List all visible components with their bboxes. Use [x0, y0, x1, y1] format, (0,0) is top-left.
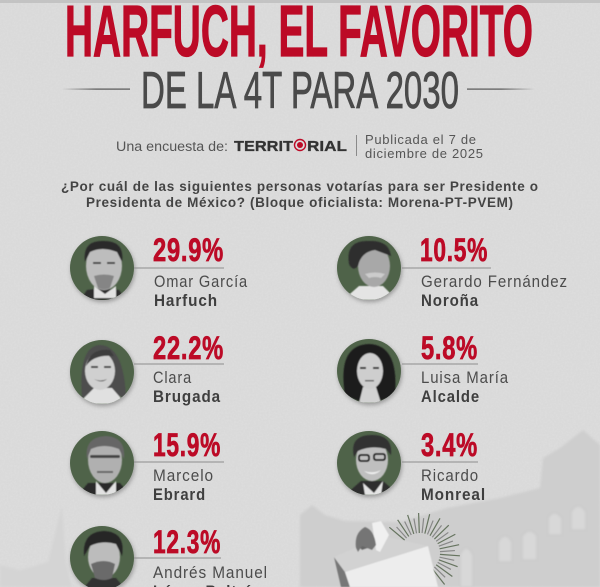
portrait: López Beltrán: [70, 526, 134, 587]
candidate: Andrés Manuel López Beltrán: [70, 524, 268, 587]
candidate: Clara Brugada: [70, 330, 224, 406]
value 12.3%: 12.3%: [153, 524, 221, 560]
value 3.4%: 3.4%: [421, 427, 478, 463]
candidate: Ricardo Monreal: Ricardo: [421, 466, 479, 485]
candidate: Luisa María Alcalde: Luisa María: [421, 368, 509, 387]
icon: ballot box with hand: [334, 521, 438, 587]
Territorial logo: TERRIT: [234, 139, 293, 155]
portrait: Brugada: [70, 340, 134, 404]
portrait: Monreal: [337, 431, 401, 495]
candidate: Andrés Manuel López Beltrán: Andrés Manuel: [153, 563, 268, 582]
portrait: Harfuch: [70, 236, 134, 300]
portrait: Alcalde: [337, 339, 401, 403]
candidate: Clara Brugada: Brugada: [153, 387, 221, 406]
candidate: Marcelo Ebrard: [70, 427, 224, 504]
survey question: [61, 179, 538, 210]
candidate: Luisa María Alcalde: Alcalde: [421, 387, 480, 406]
survey question: ¿Por cuál de las siguientes personas votarías para ser Presidente o: [61, 179, 538, 194]
candidate: Omar García Harfuch: Harfuch: [154, 291, 218, 310]
value 22.2%: 22.2%: [153, 330, 224, 366]
candidate: Gerardo Fernández Noroña: Noroña: [421, 291, 479, 310]
building silhouette background: [0, 430, 600, 587]
Territorial logo: RIAL: [307, 139, 347, 155]
candidate: Ricardo Monreal: Monreal: [421, 485, 486, 504]
survey credit line: diciembre de 2025: [365, 146, 483, 161]
value 10.5%: 10.5%: [420, 232, 488, 268]
candidate: Clara Brugada: Clara: [153, 368, 192, 387]
candidate: Gerardo Fernández Noroña: [337, 232, 568, 310]
candidate: Omar García Harfuch: [70, 232, 248, 310]
survey credit line: [116, 132, 483, 161]
survey credit line: Publicada el 7 de: [365, 132, 476, 147]
Territorial logo: [234, 139, 347, 155]
candidate: Ricardo Monreal: [337, 427, 486, 504]
survey question: Presidenta de México? (Bloque oficialista: Morena-PT-PVEM): [86, 195, 513, 210]
value 29.9%: 29.9%: [153, 232, 224, 268]
survey credit line: Una encuesta de:: [116, 139, 228, 154]
candidate: Luisa María Alcalde: [337, 330, 509, 406]
value 5.8%: 5.8%: [421, 330, 478, 366]
candidate: Omar García Harfuch: Omar García: [154, 272, 248, 291]
portrait: Noroña: [337, 236, 401, 300]
value 15.9%: 15.9%: [153, 427, 221, 463]
candidate: Gerardo Fernández Noroña: Gerardo Fernández: [421, 272, 568, 291]
icon: sunburst: [389, 513, 460, 585]
portrait: Ebrard: [70, 431, 134, 495]
candidate: Marcelo Ebrard: Marcelo: [153, 466, 214, 485]
candidate: Marcelo Ebrard: Ebrard: [153, 485, 206, 504]
